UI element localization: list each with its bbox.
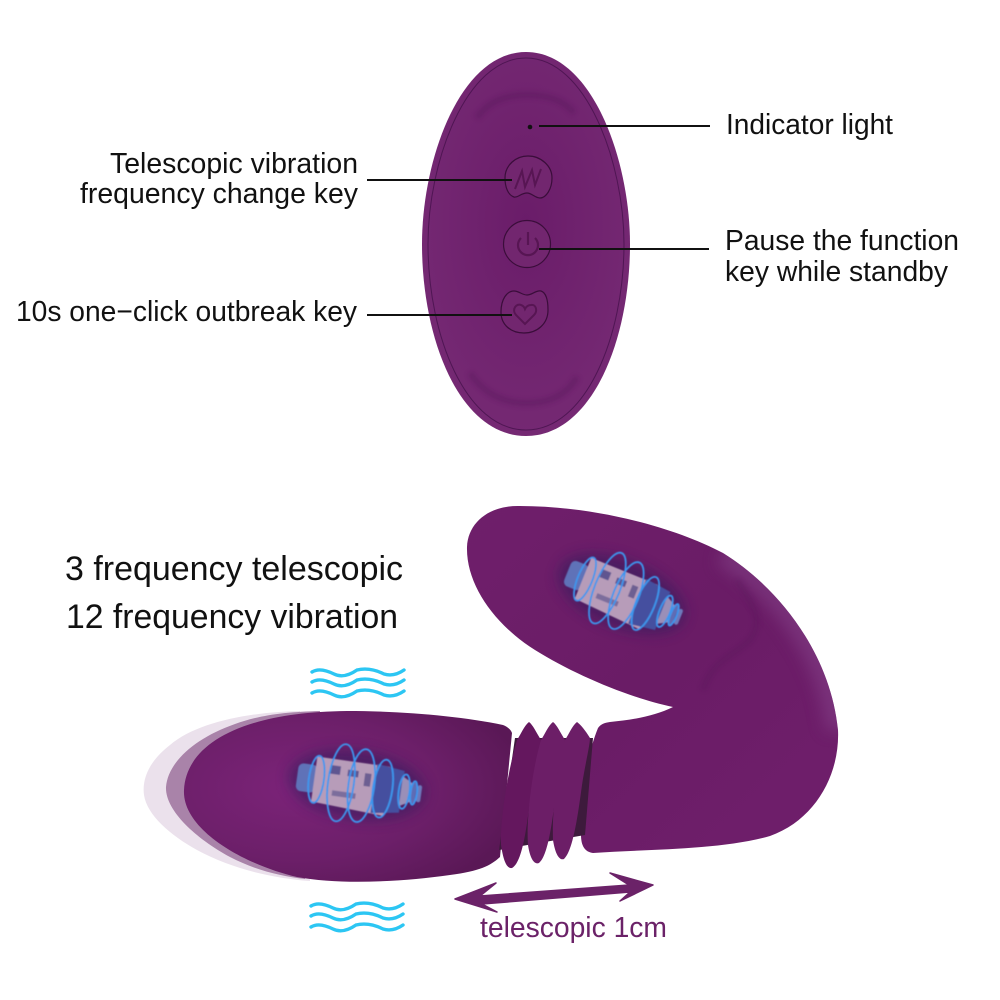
ribbed collar [499, 722, 593, 868]
label: outbreak key: 10s one−click outbreak key [16, 296, 357, 328]
remote body [422, 52, 630, 436]
indicator dot [528, 125, 532, 129]
heading: frequency specification: 12 frequency vibration [66, 598, 398, 636]
upper arm and base [460, 500, 845, 860]
label: frequency change key: Telescopic vibration [110, 148, 358, 180]
panel: product [144, 500, 845, 882]
arrow: telescopic range [455, 873, 653, 912]
leader line: indicator light [539, 125, 710, 127]
button: frequency [505, 156, 552, 198]
icon: vibration waves bottom [311, 903, 403, 931]
motion ghost inner [166, 711, 320, 879]
label: telescopic 1cm: telescopic 1cm [480, 912, 667, 944]
leader line: outbreak key [367, 314, 512, 316]
label: frequency change key: frequency change key [80, 178, 358, 210]
label: indicator light: Indicator light [726, 109, 893, 141]
button: heart [501, 291, 548, 333]
motor: lower [283, 737, 431, 833]
label: pause function key: Pause the function [725, 225, 959, 257]
heading: frequency specification: 3 frequency telescopic [65, 550, 403, 588]
remote inset outline [428, 58, 624, 430]
panel: remote control [422, 52, 630, 436]
button: power [504, 220, 550, 268]
remote upper contour [477, 95, 574, 118]
leader line: frequency key [367, 179, 512, 181]
icon: vibration waves top [312, 669, 404, 697]
motor: upper [546, 534, 698, 654]
lower arm [184, 711, 512, 882]
label: pause function key: key while standby [725, 256, 948, 288]
leader line: pause key [539, 248, 709, 250]
motion ghost outer [144, 711, 310, 881]
remote lower contour [470, 373, 577, 403]
